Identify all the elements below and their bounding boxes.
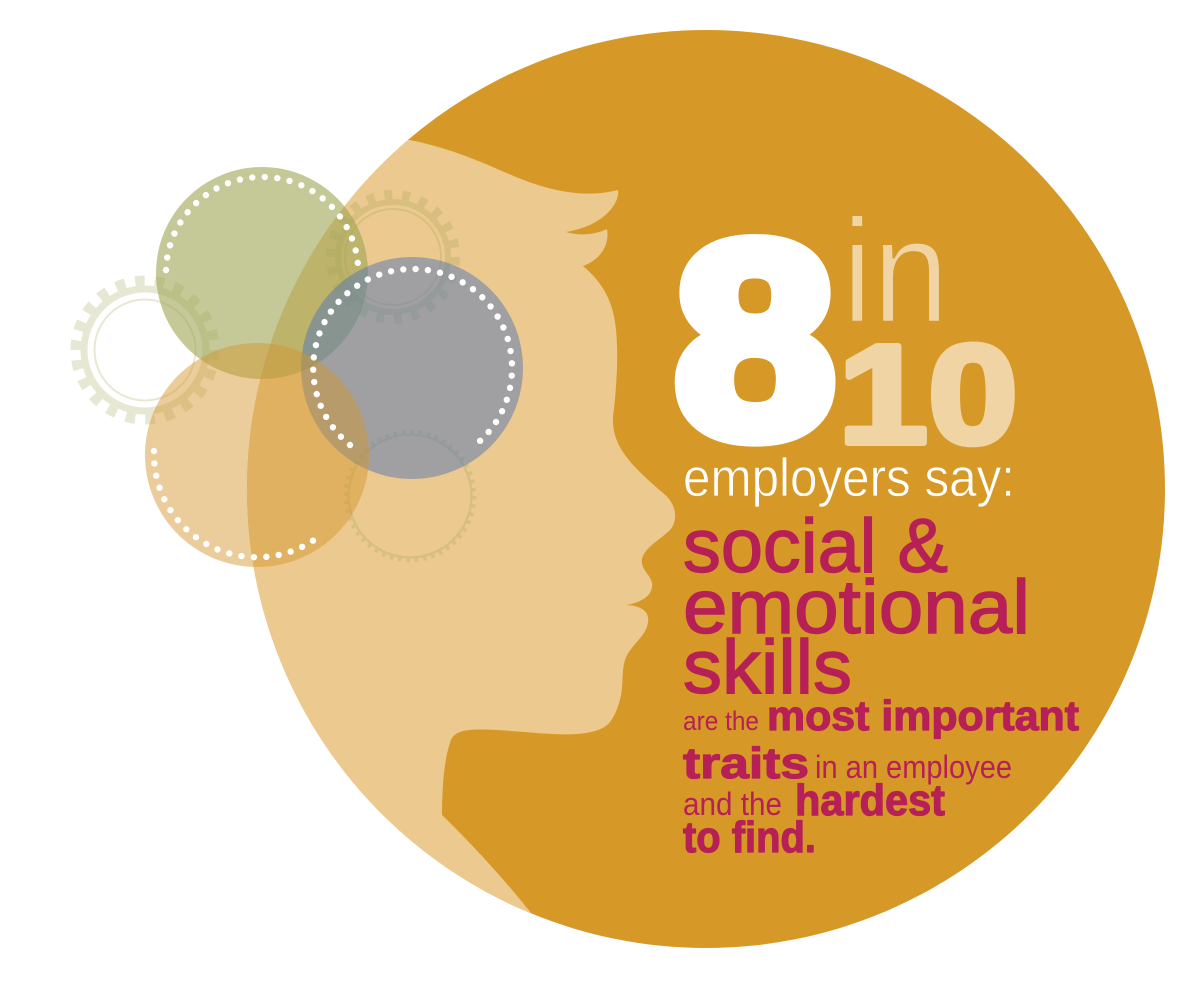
supporting statement: most important [767,692,1079,739]
supporting statement: to find. [683,813,816,862]
dotted arc on grey circle [313,269,512,446]
gear: upper right [331,195,455,319]
dotted arc on green circle [166,177,358,270]
gear: lower [346,432,474,560]
supporting statement: are the [683,706,759,736]
numeral 10: 10 [838,315,1018,473]
supporting statement: traits [683,739,809,788]
head silhouette in profile [247,140,676,913]
supporting statement: hardest [795,776,945,825]
dotted arc on tan circle [154,451,314,557]
supporting statement: and the [683,786,782,822]
numeral 8: 8 [675,187,835,494]
headline: social and emotional skills: skills [683,625,852,710]
tan translucent circle [145,343,369,567]
headline: social and emotional skills [683,504,1030,710]
blue-grey translucent circle [301,257,523,479]
word: in: in [842,189,949,354]
supporting statement: in an employee [815,749,1012,785]
large orange circle [247,30,1165,948]
green translucent circle [156,167,368,379]
gear: left [76,281,214,419]
headline: social and emotional skills: emotional [683,565,1030,650]
employers say: employers say: [683,448,1015,508]
statistic: 8 in 10 [675,187,1018,494]
supporting statement [683,692,1079,862]
headline: social and emotional skills: social & [683,504,948,589]
